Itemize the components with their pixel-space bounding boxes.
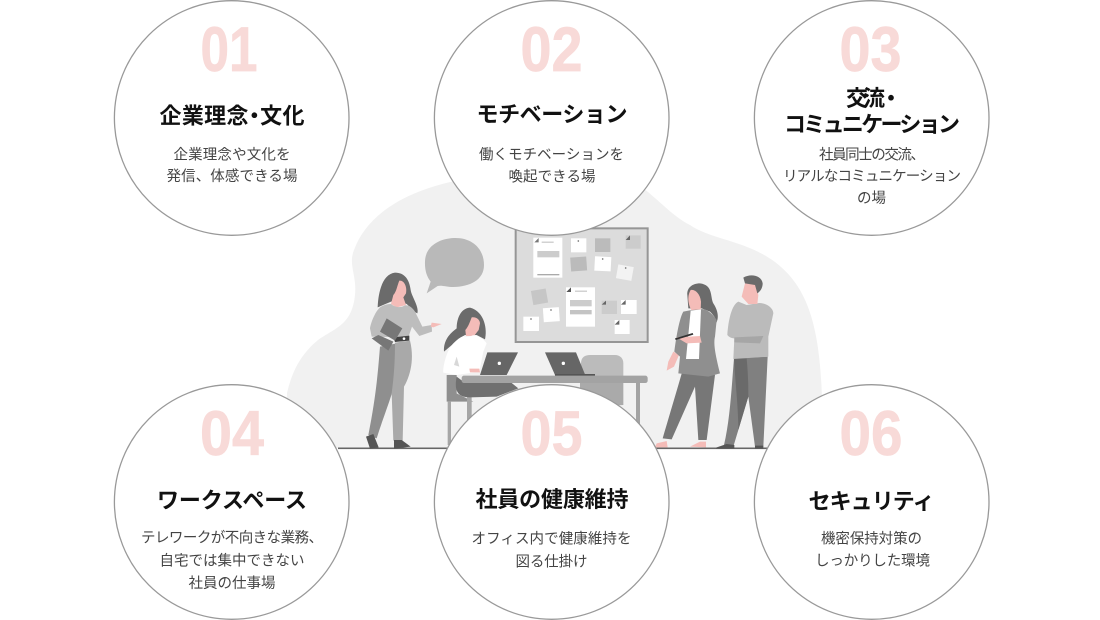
description 02	[479, 146, 624, 186]
heading 04: ワークスペース	[157, 488, 307, 513]
description 04: 社員の仕事場	[188, 575, 276, 592]
description 03: の場	[857, 190, 886, 207]
figure: man thinking	[716, 275, 773, 449]
figure: standing woman	[366, 273, 442, 449]
circle 05	[434, 385, 669, 619]
heading 05: 社員の健康維持	[476, 487, 628, 512]
icon: speech bubble	[425, 238, 484, 293]
figure: woman with pen	[655, 283, 720, 447]
number 01: 01	[200, 15, 258, 85]
circle 03	[754, 1, 989, 235]
desk	[462, 376, 648, 425]
description 02: 喚起できる場	[508, 168, 596, 186]
circle 04	[114, 385, 349, 619]
chair: back	[580, 355, 623, 407]
heading 02: モチベーション	[476, 102, 628, 127]
description 01: 発信、体感できる場	[166, 168, 298, 185]
figure: seated woman	[443, 308, 518, 397]
number 03: 03	[840, 15, 902, 85]
description 05: オフィス内で健康維持を	[472, 530, 632, 548]
description 04	[141, 530, 323, 592]
description 02: 働くモチベーションを	[479, 146, 624, 164]
heading 03	[784, 86, 960, 137]
description 06	[815, 530, 930, 570]
description 03: 社員同士の交流、	[819, 146, 925, 164]
description 04: テレワークが不向きな業務、	[141, 530, 323, 546]
description 03: リアルなコミュニケーション	[783, 168, 961, 185]
heading 03: コミュニケーション	[784, 112, 960, 137]
number 02: 02	[520, 15, 582, 85]
laptop: left	[480, 352, 518, 375]
circle 02	[434, 1, 669, 235]
description 04: 自宅では集中できない	[160, 552, 304, 570]
description 05	[472, 530, 632, 570]
description 01	[166, 146, 298, 185]
laptop: right	[545, 352, 595, 376]
description 06: 機密保持対策の	[821, 530, 922, 548]
description 06: しっかりした環境	[815, 552, 930, 570]
heading 03: 交流・	[846, 86, 902, 111]
circle 06	[754, 385, 989, 619]
sticky notes	[523, 235, 641, 334]
illustration: left figures	[366, 238, 518, 449]
description 01: 企業理念や文化を	[174, 146, 290, 164]
description 03	[783, 146, 961, 207]
chair	[447, 375, 473, 445]
number 05: 05	[520, 399, 582, 469]
circle 01	[114, 1, 349, 235]
document 1	[533, 238, 562, 278]
illustration: board, desk and right figures	[462, 228, 773, 449]
document 2	[566, 287, 595, 327]
heading 01: 企業理念・文化	[160, 104, 304, 128]
heading 06: セキュリティ	[808, 489, 934, 514]
number 06: 06	[840, 399, 902, 469]
ground line	[338, 448, 793, 449]
notice board	[516, 228, 648, 342]
background blob	[287, 178, 822, 448]
description 05: 図る仕掛け	[516, 554, 588, 570]
number 04: 04	[200, 399, 264, 469]
